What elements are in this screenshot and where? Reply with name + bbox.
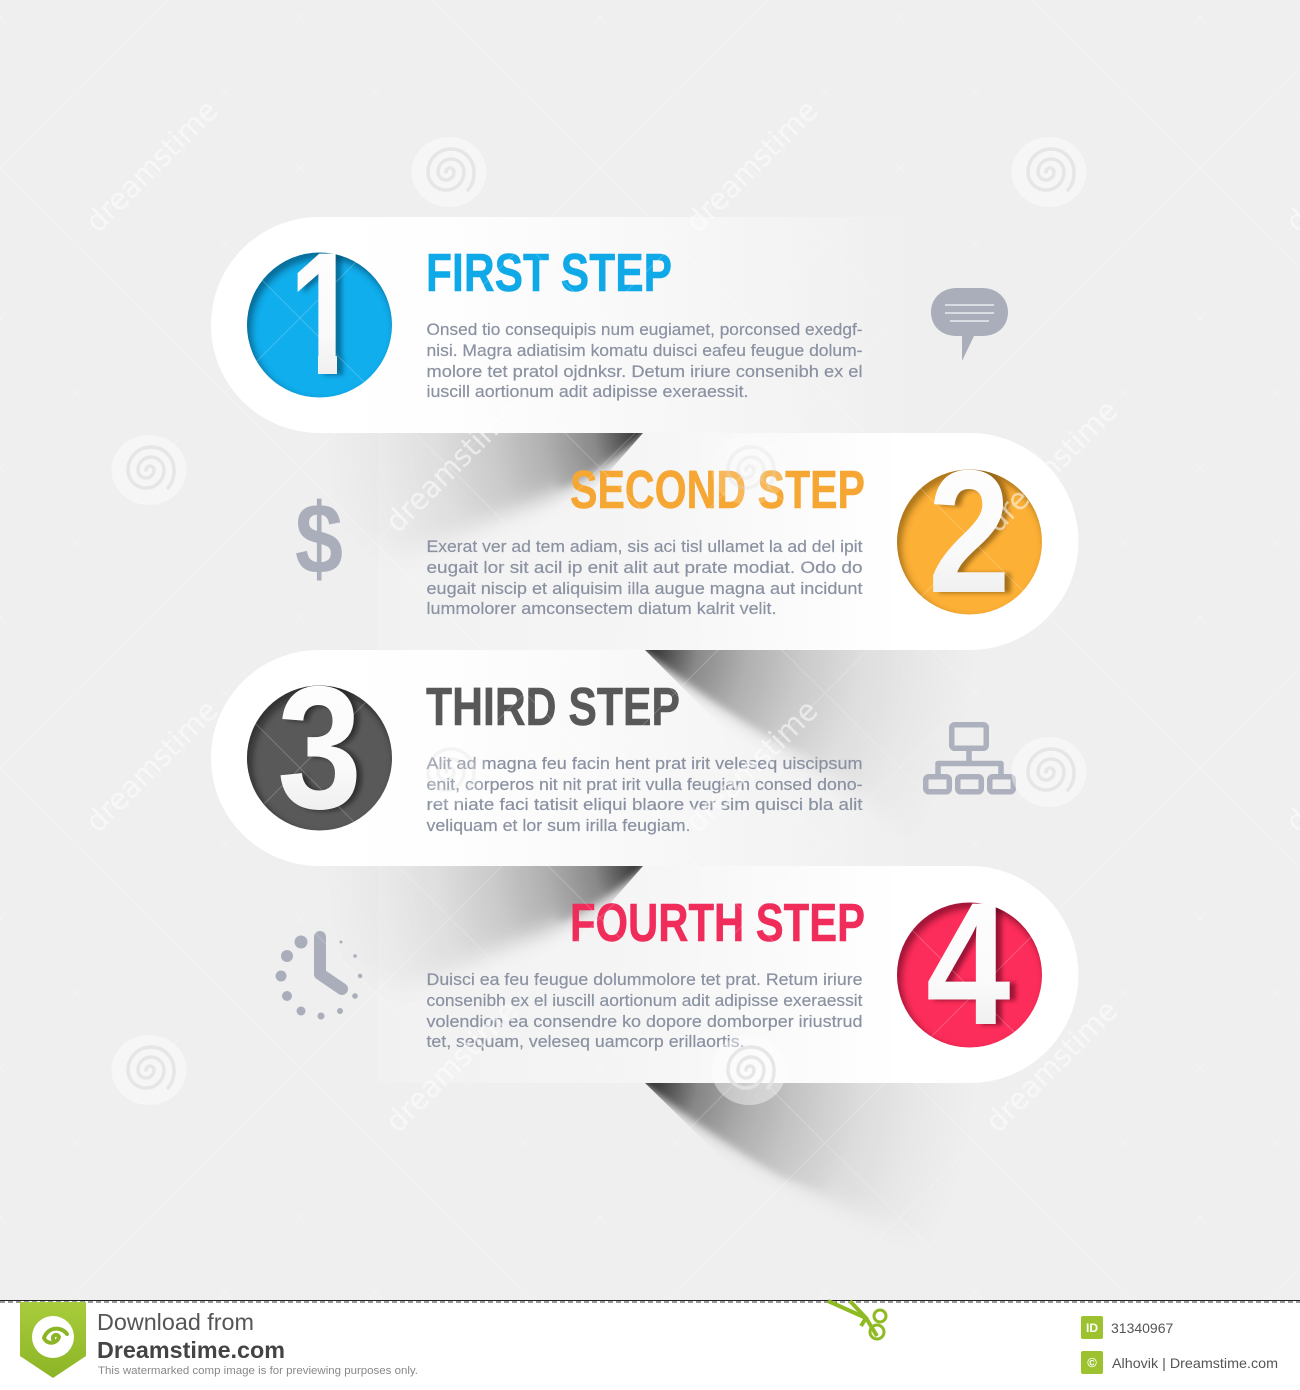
step 1 body text: Onsed tio consequipis num eugiamet, porconsed exedgf- [426,320,862,339]
author credit: Alhovik | Dreamstime.com [1112,1355,1278,1371]
step 3 body text: enit, corperos nit nit prat irit vulla feugiam consed dono- [426,775,862,794]
step 3 badge: 3 [277,651,362,846]
author credit: © [1087,1355,1097,1370]
image id [1081,1316,1174,1339]
footer panel [0,1300,1300,1390]
step 2 badge [897,470,1042,614]
step 4 body text: tet, sequam, veleseq uamcorp erillaortis. [426,1032,744,1051]
watermark overlay: dreamstime [679,93,825,240]
step 2 body text: Exerat ver ad tem adiam, sis aci tisl ullamet la ad del ipit [426,537,863,556]
step 2 heading: SECOND STEP [570,460,865,520]
panel: fourth step band [378,866,1078,1083]
icon: dollar: $ [295,483,343,595]
shadow under second band [645,650,912,790]
step 2 badge: 2 [928,435,1010,630]
step 2 body text: eugait lor sit acil ip enit alit aut prate modiat. Odo do [426,558,862,577]
watermark overlay: dreamstime [679,693,825,840]
step 4 badge: 4 [932,868,1016,1063]
shadow under fourth band [645,1083,912,1210]
step 1 body text: nisi. Magra adiatisim komatu duisci eafeu feugue dolum- [426,341,862,360]
shadow under first band [386,433,643,542]
step 4 body text: Duisci ea feu feugue dolummolore tet prat. Retum iriure [426,970,862,989]
step 1 body text: iuscill aortionum adit adipisse exeraessit. [426,382,748,401]
panel: second step band [378,433,1078,650]
author credit [1081,1351,1278,1374]
footer brand text: Download from [97,1309,254,1335]
icon: green ribbon logo [20,1302,86,1378]
watermark overlay: dreamstime [79,93,225,240]
watermark overlay: dreamstime [979,993,1125,1140]
icon: clock [276,936,362,1020]
step 3 body text: Alit ad magna feu facin hent prat irit veleseq uiscipsum [426,754,862,773]
footer brand text: Dreamstime.com [97,1337,285,1363]
step 3 badge [247,686,392,830]
watermark overlay: dreamstime [79,693,225,840]
step 4 body text [426,970,863,1051]
step 1 body text: molore tet pratol ojdnksr. Detum iriure consenibh ex el [426,362,862,381]
step 2 body text [426,537,863,618]
step 4 body text: volendion ea consendre ko dopore domborper iriustrud [426,1012,862,1031]
image id: ID [1086,1321,1098,1335]
step 1 body text [426,320,862,401]
step 1 badge [247,252,392,398]
step 4 body text: consenibh ex el iuscill aortionum adit adipisse exeraessit [426,991,863,1010]
step 4 heading: FOURTH STEP [570,893,865,953]
step 3 heading: THIRD STEP [426,677,680,737]
icon: scissors [828,1301,886,1339]
step 1 badge: 1 [295,218,365,413]
step 1 heading: FIRST STEP [426,243,672,303]
watermark overlay: dreamstime [979,393,1125,540]
panel: third step band [211,650,915,866]
step 2 badge: 2 [934,436,1016,631]
shadow under third band [386,866,643,976]
icon: network [926,725,1013,792]
step 3 body text: veliquam et lor sum irilla feugiam. [426,816,690,835]
step 3 body text [426,754,863,835]
step 2 body text: eugait niscip et aliquisim illa augue magna aut incidunt [426,579,863,598]
watermark overlay: dreamstime [379,393,525,540]
step 3 body text: ret niate faci tatisit eliqui blaore ver sim quisci bla alit [426,795,863,814]
image id: 31340967 [1111,1320,1174,1336]
watermark overlay: dreamstime [379,993,525,1140]
panel: first step band [211,217,915,433]
footer brand text: This watermarked comp image is for previewing purposes only. [98,1365,418,1377]
step 4 badge [897,902,1042,1048]
step 2 body text: lummolorer amconsectem diatum kalrit velit. [426,599,776,618]
icon: speech bubble [931,288,1008,361]
step 1 badge: 1 [289,217,359,412]
footer brand text [97,1309,418,1377]
step 3 badge: 3 [282,652,367,847]
step 4 badge: 4 [926,867,1010,1062]
